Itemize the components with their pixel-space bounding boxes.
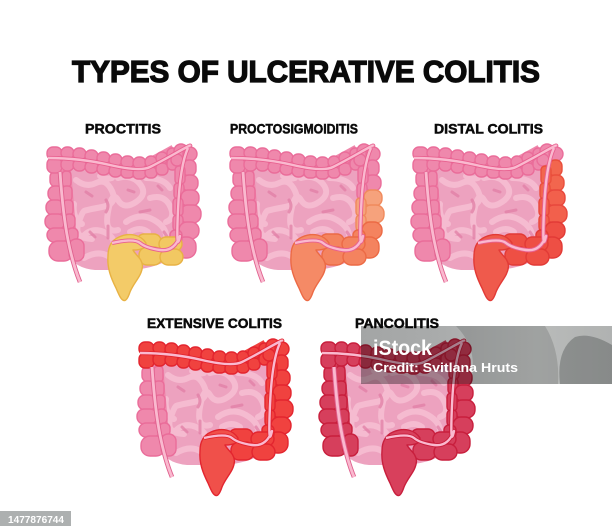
heading: pancolitis: PANCOLITIS (355, 316, 439, 331)
title: TYPES OF ULCERATIVE COLITIS (72, 54, 540, 89)
diagram: proctosigmoiditis colon (228, 144, 384, 301)
watermark credit text: Credit: Svitlana Hruts (373, 361, 518, 375)
diagram: distal colitis colon (411, 144, 567, 301)
diagram: proctitis colon (45, 144, 201, 301)
stock id tag: 1477876744 (8, 514, 64, 526)
heading: proctosigmoiditis: PROCTOSIGMOIDITIS (230, 122, 358, 136)
heading: proctitis: PROCTITIS (85, 122, 161, 136)
stock id tag (0, 511, 71, 526)
watermark logo text: iStock (373, 337, 432, 360)
diagram: pancolitis colon (319, 339, 475, 496)
heading: extensive colitis: EXTENSIVE COLITIS (147, 316, 282, 331)
heading: distal colitis: DISTAL COLITIS (434, 122, 543, 136)
diagram: extensive colitis colon (137, 339, 293, 496)
watermark: iStock credit band (361, 326, 612, 384)
